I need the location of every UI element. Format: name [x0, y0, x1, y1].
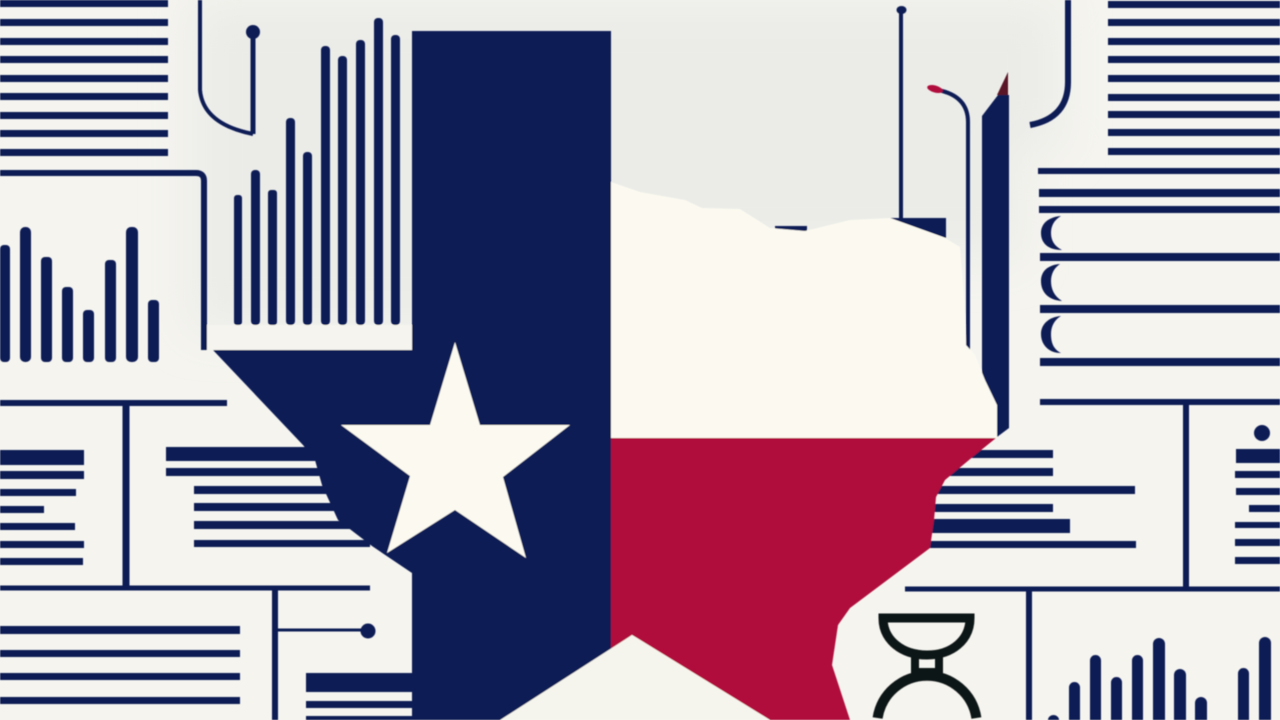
- top-right text lines: [1108, 1, 1280, 155]
- text block: bottom-centre card: [306, 673, 412, 720]
- red-tipped lamp line: [926, 84, 968, 350]
- Texas map: navy field: [213, 31, 611, 720]
- antenna and platform: [775, 6, 946, 238]
- text block: far-right card: [1235, 425, 1280, 564]
- top-left text lines: [0, 0, 168, 156]
- Texas map: red field: [611, 438, 996, 720]
- bar chart: bottom right: [1048, 637, 1271, 720]
- icon: lone star: [341, 342, 570, 558]
- Texas map: white field: [611, 182, 997, 438]
- left chart base panel: [207, 325, 412, 350]
- panel frame: lower-left grid: [0, 403, 376, 720]
- text block: right card: [925, 450, 1136, 548]
- icon: stacked books: [1038, 168, 1280, 366]
- right hook connector: [1030, 0, 1068, 125]
- text block: left card: [0, 450, 84, 565]
- bottom cream notch: [500, 635, 770, 720]
- navy pencil strip: [982, 72, 1009, 437]
- panel frame: lower-right grid: [905, 402, 1280, 720]
- text block: bottom-left card: [0, 626, 240, 704]
- text block: middle card: [166, 447, 370, 547]
- panel frame: left chart: [0, 173, 204, 350]
- icon: left hook connector: [200, 0, 260, 134]
- icon: black hourglass flask: [878, 618, 976, 718]
- bar chart: left: [0, 227, 159, 362]
- bar chart: upper centre-left: [234, 18, 400, 325]
